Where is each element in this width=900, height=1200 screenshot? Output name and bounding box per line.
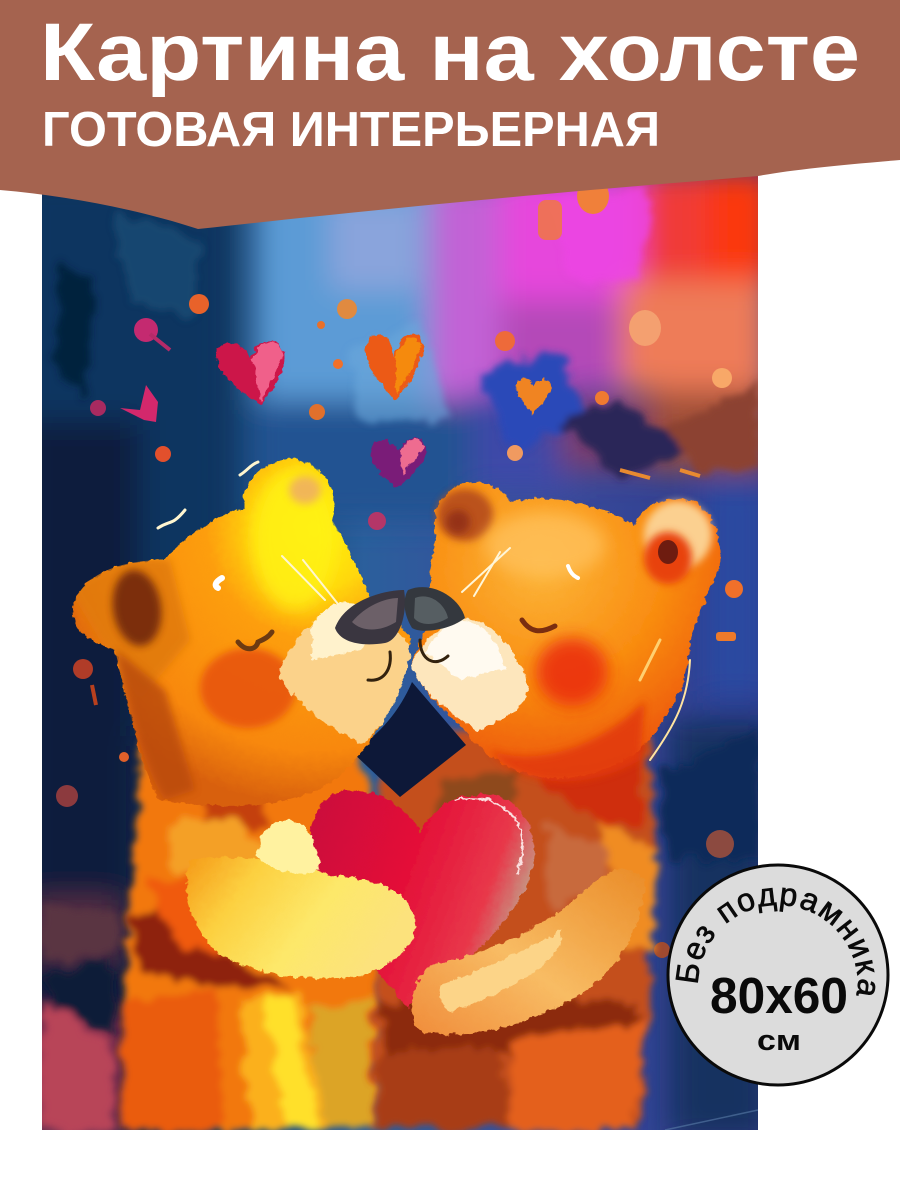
painting: two kissing teddy bears <box>20 170 775 1140</box>
icon: heart pink <box>216 341 284 405</box>
left bear nose <box>335 590 405 644</box>
right bear ears and head <box>411 482 720 778</box>
right bear shading <box>437 489 712 781</box>
badge: size without stretcher <box>666 864 890 1086</box>
title: Картина на холсте <box>40 7 860 98</box>
left bear mouth <box>368 652 390 680</box>
left bear arm <box>186 820 416 978</box>
left bear eye <box>238 632 272 649</box>
left bear muzzle <box>278 603 410 745</box>
painted background <box>20 170 775 1140</box>
left bear body <box>122 735 385 1130</box>
right bear mouth <box>420 640 448 662</box>
left bear shading <box>70 470 337 800</box>
dark gap between bears <box>352 682 466 797</box>
badge: size without stretcher: Без подрамника <box>675 888 876 996</box>
right bear nose <box>405 587 465 631</box>
right bear body <box>372 735 656 1130</box>
left bear ear and head <box>72 460 410 806</box>
right bear arm <box>411 869 645 1035</box>
icon: heart orange <box>365 334 422 400</box>
icon: heart small orange <box>517 378 551 414</box>
right bear eye <box>522 620 555 631</box>
icon: heart purple <box>371 439 426 488</box>
paint spots <box>56 178 758 1130</box>
red heart <box>310 790 534 1007</box>
header banner <box>0 0 900 229</box>
badge: size without stretcher: см <box>757 1025 801 1057</box>
badge: size without stretcher: 80x60 <box>710 967 848 1024</box>
right bear highlights <box>462 548 690 760</box>
left bear highlights <box>158 462 338 604</box>
brush strokes <box>42 190 758 1130</box>
right bear muzzle <box>411 619 528 730</box>
subtitle: ГОТОВАЯ ИНТЕРЬЕРНАЯ <box>42 103 660 157</box>
